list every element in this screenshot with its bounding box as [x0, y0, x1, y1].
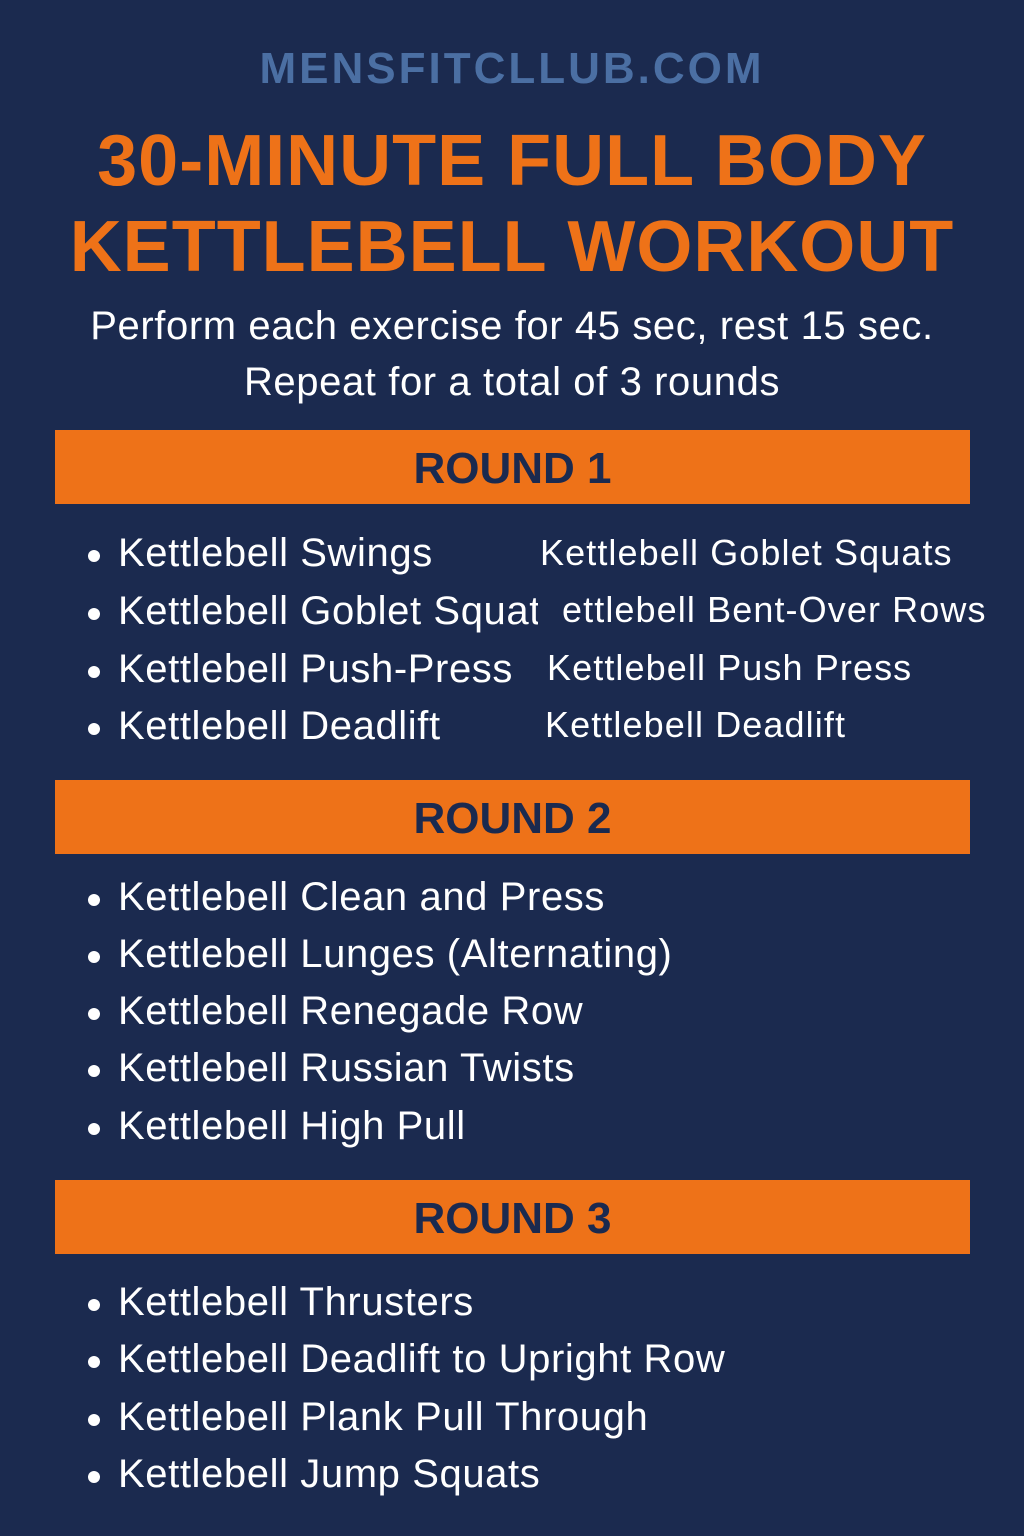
round 1 list: Kettlebell Push-Press: [118, 647, 513, 691]
title: KETTLEBELL WORKOUT: [70, 207, 954, 287]
round 3 list: Kettlebell Jump Squats: [118, 1452, 540, 1496]
title: [70, 121, 954, 287]
round 3 list: Kettlebell Plank Pull Through: [118, 1395, 648, 1439]
round 1 list: Kettlebell Push Press: [547, 647, 912, 688]
round 3 bar: [55, 1180, 970, 1254]
subtitle: Perform each exercise for 45 sec, rest 15 sec.: [90, 304, 934, 348]
round 1 list: Kettlebell Deadlift: [118, 704, 441, 748]
round 1 list: Kettlebell Goblet Squats: [540, 532, 953, 573]
round 2 bar: ROUND 2: [413, 794, 612, 843]
round 1 bar: ROUND 1: [413, 444, 612, 493]
site header: MENSFITCLLUB.COM: [259, 44, 765, 93]
round 3 list: Kettlebell Thrusters: [118, 1280, 474, 1324]
round 2 list: Kettlebell Russian Twists: [118, 1046, 575, 1090]
round 1 bar: [55, 430, 970, 504]
round 2 list: Kettlebell High Pull: [118, 1104, 466, 1148]
title: 30-MINUTE FULL BODY: [97, 121, 927, 201]
round 2 bar: [55, 780, 970, 854]
round 2 list: Kettlebell Lunges (Alternating): [118, 932, 672, 976]
round 1 list: [88, 531, 987, 748]
round 1 list: Kettlebell Swings: [118, 531, 433, 575]
round 3 list: [88, 1280, 725, 1496]
subtitle: Repeat for a total of 3 rounds: [244, 360, 780, 404]
round 2 list: [88, 875, 672, 1148]
round 1 list: ettlebell Bent-Over Rows: [562, 589, 987, 630]
round 3 list: Kettlebell Deadlift to Upright Row: [118, 1337, 725, 1381]
round 2 list: Kettlebell Renegade Row: [118, 989, 583, 1033]
round 1 list: Kettlebell Deadlift: [545, 704, 846, 745]
subtitle: [90, 304, 934, 404]
round 2 list: Kettlebell Clean and Press: [118, 875, 605, 919]
round 3 bar: ROUND 3: [413, 1194, 612, 1243]
